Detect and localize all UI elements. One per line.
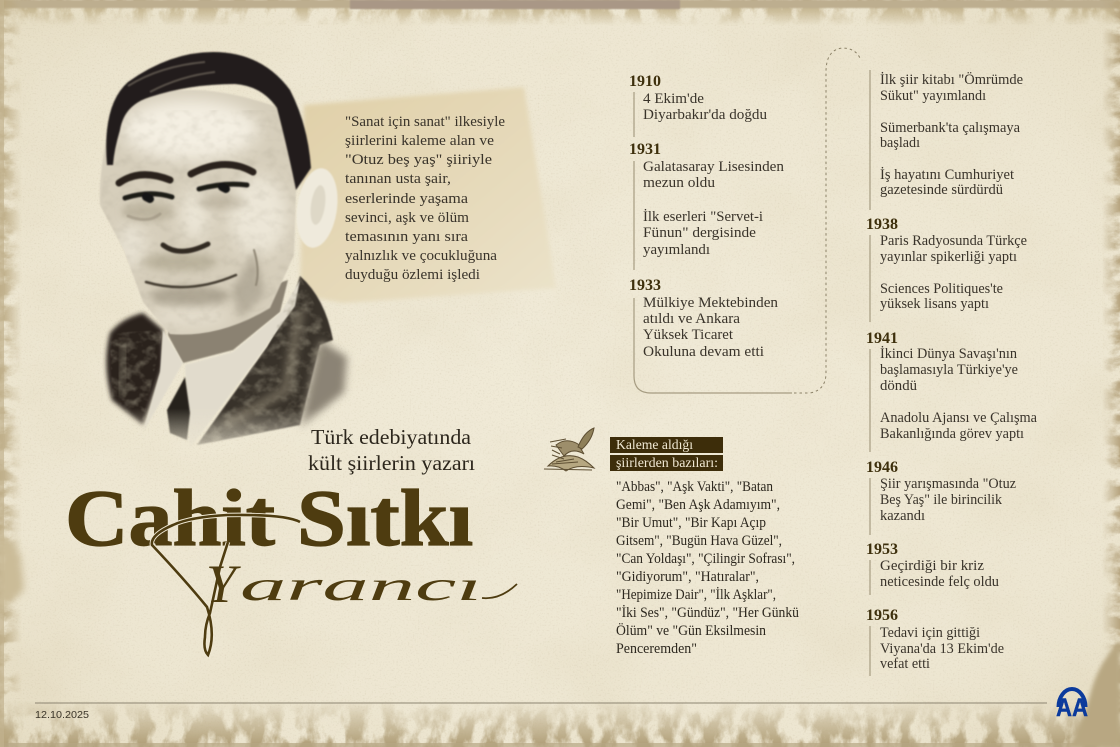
poems list: Gemi", "Ben Aşk Adamıyım", bbox=[616, 497, 780, 513]
1931 entry: mezun oldu bbox=[643, 175, 715, 191]
1933 entry continued: Sümerbank'ta çalışmaya bbox=[880, 120, 1021, 136]
poems list bbox=[616, 479, 799, 657]
intro text: "Otuz beş yaş" şiiriyle bbox=[345, 152, 492, 168]
poems list: "Can Yoldaşı", "Çilingir Sofrası", bbox=[616, 551, 795, 567]
intro text: şiirlerini kaleme alan ve bbox=[345, 133, 494, 149]
1933 entry: atıldı ve Ankara bbox=[643, 311, 741, 327]
poems heading: Kaleme aldığı bbox=[616, 438, 693, 453]
neck bbox=[168, 280, 288, 363]
1953 entry: neticesinde felç oldu bbox=[880, 574, 999, 590]
ear bbox=[296, 168, 338, 248]
1910 entry: 4 Ekim'de bbox=[643, 91, 704, 107]
footer line and date: 12.10.2025 bbox=[35, 709, 89, 721]
poems list: "Gidiyorum", "Hatıralar", bbox=[616, 569, 759, 585]
poems list: Penceremden" bbox=[616, 641, 697, 657]
1941 entry: başlamasıyla Türkiye'ye bbox=[880, 362, 1018, 378]
intro text: eserlerinde yaşama bbox=[345, 191, 469, 207]
title: Yarancı script with flourish bbox=[152, 515, 517, 655]
intro text: "Sanat için sanat" ilkesiyle bbox=[345, 114, 505, 130]
1938 entry: Paris Radyosunda Türkçe bbox=[880, 233, 1027, 249]
1946 entry: Beş Yaş" ile birincilik bbox=[880, 492, 1003, 508]
1933 entry continued: başladı bbox=[880, 135, 920, 151]
1938 entry: yüksek lisans yaptı bbox=[880, 296, 989, 312]
timeline: right column bbox=[866, 70, 1038, 676]
poems list: "İki Ses", "Gündüz", "Her Günkü bbox=[616, 605, 799, 621]
AA logo: AA bbox=[1056, 694, 1088, 722]
1956 entry: Viyana'da 13 Ekim'de bbox=[880, 641, 1004, 657]
quote note paper bbox=[300, 87, 556, 303]
1933 entry bbox=[629, 277, 779, 360]
title: Cahit Sıtkı: Cahit Sıtkı bbox=[65, 475, 473, 563]
poems list: "Hepimize Dair", "İlk Aşklar", bbox=[616, 587, 776, 603]
title: Yarancı script with flourish: Y bbox=[206, 554, 241, 614]
portrait photo bbox=[100, 52, 347, 448]
tie bbox=[167, 377, 190, 440]
1946 entry: Şiir yarışmasında "Otuz bbox=[880, 476, 1017, 492]
1910 entry: 1910 bbox=[629, 73, 661, 90]
shirt and collar bbox=[145, 280, 300, 428]
subtitle: kült şiirlerin yazarı bbox=[308, 451, 475, 475]
subtitle: Türk edebiyatında bbox=[311, 425, 472, 449]
1941 entry: Bakanlığında görev yaptı bbox=[880, 426, 1024, 442]
1953 entry bbox=[866, 541, 999, 595]
1941 entry bbox=[866, 330, 1038, 452]
1933 entry: Okuluna devam etti bbox=[643, 344, 764, 360]
1946 entry bbox=[866, 459, 1017, 535]
poems heading: şiirlerden bazıları: bbox=[616, 456, 718, 471]
intro text: duyduğu özlemi işledi bbox=[345, 267, 480, 283]
1953 entry: Geçirdiği bir kriz bbox=[880, 558, 985, 574]
timeline connector bbox=[634, 48, 860, 393]
poems list: Ölüm" ve "Gün Eksilmesin bbox=[616, 622, 767, 639]
1933 entry: 1933 bbox=[629, 277, 661, 294]
timeline: left column bbox=[629, 73, 785, 360]
intro text bbox=[345, 114, 505, 283]
face mottling bbox=[122, 110, 290, 320]
hair bbox=[106, 52, 311, 190]
1933 entry: Yüksek Ticaret bbox=[643, 327, 733, 343]
poems list: "Abbas", "Aşk Vakti", "Batan bbox=[616, 479, 774, 495]
1933 entry continued: gazetesinde sürdürdü bbox=[880, 182, 1003, 198]
title: Yarancı script with flourish: arancı bbox=[240, 564, 482, 610]
1931 entry: yayımlandı bbox=[643, 242, 710, 258]
1956 entry: 1956 bbox=[866, 607, 898, 624]
face highlights bbox=[118, 100, 288, 328]
1933 entry continued: İlk şiir kitabı "Ömrümde bbox=[880, 71, 1023, 88]
1938 entry: 1938 bbox=[866, 216, 898, 233]
1941 entry: döndü bbox=[880, 378, 917, 394]
1931 entry: Fünun" dergisinde bbox=[643, 225, 756, 241]
intro text: sevinci, aşk ve ölüm bbox=[345, 210, 470, 226]
1938 entry: Sciences Politiques'te bbox=[880, 281, 1003, 297]
1931 entry: İlk eserleri "Servet-i bbox=[643, 209, 763, 225]
1933 entry continued bbox=[870, 70, 1023, 210]
1938 entry bbox=[866, 216, 1027, 322]
intro text: yalnızlık ve çocukluğuna bbox=[345, 248, 498, 264]
1933 entry: Mülkiye Mektebinden bbox=[643, 295, 779, 311]
poems list: Gitsem", "Bugün Hava Güzel", bbox=[616, 533, 782, 549]
1910 entry: Diyarbakır'da doğdu bbox=[643, 107, 767, 123]
1953 entry: 1953 bbox=[866, 541, 898, 558]
1946 entry: 1946 bbox=[866, 459, 898, 476]
intro text: temasının yanı sıra bbox=[345, 229, 469, 245]
face shadows bbox=[122, 194, 265, 318]
hair highlights bbox=[128, 62, 215, 92]
1931 entry: 1931 bbox=[629, 141, 661, 158]
poems heading bbox=[610, 437, 723, 471]
1956 entry: vefat etti bbox=[880, 656, 930, 672]
1946 entry: kazandı bbox=[880, 508, 925, 524]
suit bbox=[106, 276, 347, 445]
1931 entry: Galatasaray Lisesinden bbox=[643, 159, 785, 175]
1933 entry continued: İş hayatını Cumhuriyet bbox=[880, 167, 1014, 183]
intro text: tanınan usta şair, bbox=[345, 171, 451, 187]
subtitle bbox=[308, 425, 475, 475]
1933 entry continued: Sükut" yayımlandı bbox=[880, 88, 986, 104]
1941 entry: 1941 bbox=[866, 330, 898, 347]
1910 entry bbox=[629, 73, 767, 137]
1956 entry: Tedavi için gittiği bbox=[880, 625, 980, 641]
1938 entry: yayınlar spikerliği yaptı bbox=[880, 249, 1017, 265]
icon: book and quill bbox=[544, 428, 594, 471]
eyes, brows, nose, mouth bbox=[119, 164, 258, 287]
poems list: "Bir Umut", "Bir Kapı Açıp bbox=[616, 515, 766, 531]
1941 entry: Anadolu Ajansı ve Çalışma bbox=[880, 410, 1038, 426]
suit mottling bbox=[110, 276, 333, 445]
1956 entry bbox=[866, 607, 1004, 676]
1941 entry: İkinci Dünya Savaşı'nın bbox=[880, 346, 1018, 362]
1931 entry bbox=[629, 141, 785, 270]
face bbox=[100, 90, 296, 334]
